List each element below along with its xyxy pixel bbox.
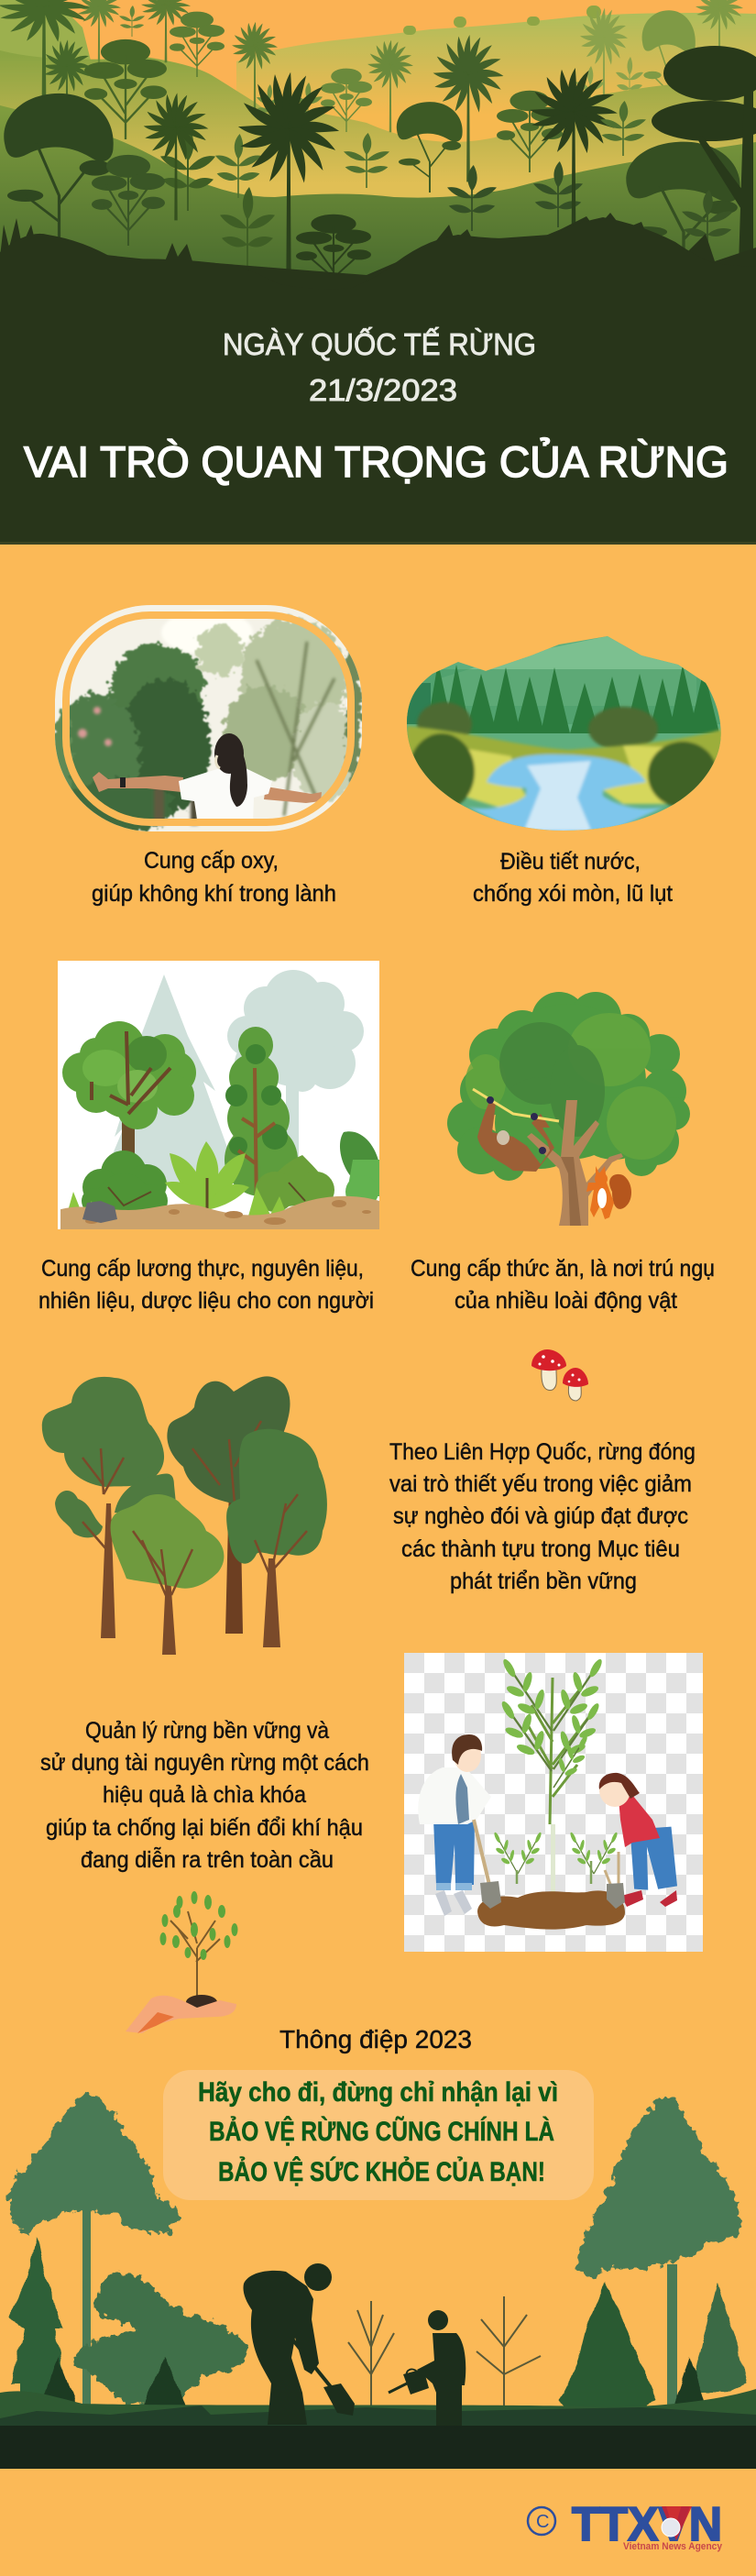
caption: oxygen — [92, 848, 336, 907]
panel: forest resources — [58, 961, 379, 1229]
caption: resources: Cung cấp lương thực, nguyên liệu, — [41, 1256, 364, 1282]
tree back left — [42, 1377, 164, 1638]
caption: animals — [411, 1256, 715, 1314]
text: sustainable management: giúp ta chống lại biến đổi khí hậu — [46, 1815, 363, 1841]
text: United Nations: sự nghèo đói và giúp đạt được — [393, 1503, 688, 1529]
soil — [58, 1196, 379, 1229]
mid trees — [0, 0, 413, 139]
caption: oxygen: giúp không khí trong lành — [92, 881, 336, 907]
ground — [0, 2389, 756, 2438]
tree front right — [226, 1429, 327, 1647]
boy silhouette — [389, 2310, 466, 2426]
text: sustainable management: đang diễn ra trên toàn cầu — [81, 1846, 334, 1873]
copyright mark — [528, 2507, 555, 2535]
caption: water — [473, 849, 673, 907]
panel: oxygen photo — [52, 605, 362, 834]
main title: VAI TRÒ QUAN TRỌNG CỦA RỪNG — [24, 437, 729, 486]
caption: oxygen: Cung cấp oxy, — [144, 848, 279, 874]
tree back centre — [167, 1376, 290, 1634]
foreground bushes — [69, 1131, 379, 1216]
panel: lake and forest — [403, 633, 729, 834]
icon: mushrooms — [531, 1349, 588, 1401]
trunk — [527, 1100, 623, 1226]
panel: tree with animals — [447, 992, 690, 1226]
copyright mark: C — [536, 2512, 549, 2532]
girl — [599, 1773, 677, 1909]
tree front small — [111, 1474, 224, 1655]
man — [243, 2263, 355, 2425]
text: United Nations: Theo Liên Hợp Quốc, rừng đóng — [389, 1439, 696, 1465]
caption: water: Điều tiết nước, — [500, 849, 641, 875]
sapling — [493, 1657, 619, 1893]
text: sustainable management: hiệu quả là chìa khóa — [103, 1782, 306, 1808]
orangutan — [473, 1089, 559, 1172]
tall middle tree — [225, 1027, 298, 1210]
background pine and tree — [101, 970, 364, 1183]
ring — [66, 615, 351, 822]
icon: sapling in hands — [126, 1891, 238, 2033]
message box: BẢO VỆ SỨC KHỎE CỦA BẠN! — [218, 2156, 545, 2187]
caption: animals: Cung cấp thức ăn, là nơi trú ngụ — [411, 1256, 715, 1282]
crown — [447, 992, 690, 1181]
text: sustainable management — [40, 1718, 369, 1873]
header banner — [0, 0, 756, 545]
far trees — [575, 0, 743, 116]
caption: animals: của nhiều loài động vật — [455, 1288, 677, 1314]
trees right — [559, 2094, 747, 2420]
logo: TTXVN: Vietnam News Agency — [623, 2541, 723, 2552]
caption: resources: nhiên liệu, dược liệu cho con người — [38, 1288, 374, 1314]
rock — [82, 1201, 117, 1223]
text: United Nations: phát triển bền vững — [450, 1569, 637, 1594]
saplings — [348, 2296, 541, 2420]
message box: BẢO VỆ RỪNG CŨNG CHÍNH LÀ — [209, 2116, 554, 2147]
panel: people planting trees — [404, 1653, 703, 1952]
text: sustainable management: Quản lý rừng bền vững và — [85, 1718, 329, 1744]
message box: Hãy cho đi, đừng chỉ nhận lại vì — [198, 2077, 558, 2108]
caption: resources — [38, 1256, 374, 1314]
text: sustainable management: sử dụng tài nguyên rừng một cách — [40, 1750, 369, 1776]
soil mound — [477, 1890, 625, 1930]
near trees — [0, 35, 756, 303]
boy — [418, 1734, 501, 1916]
header subtitle: NGÀY QUỐC TẾ RỪNG — [223, 326, 536, 361]
heading: message 2023: Thông điệp 2023 — [279, 2025, 472, 2053]
left tree — [62, 1021, 196, 1164]
squirrel — [586, 1166, 631, 1219]
woman — [93, 733, 322, 825]
caption: water: chống xói mòn, lũ lụt — [473, 881, 673, 907]
message box — [163, 2070, 594, 2200]
trees left — [9, 2092, 248, 2420]
header subtitle — [223, 326, 536, 407]
text: United Nations: các thành tựu trong Mục tiêu — [401, 1536, 680, 1562]
logo: TTXVN: TTXVN — [572, 2498, 722, 2551]
illustration: planting silhouette scene — [0, 2092, 756, 2469]
text: United Nations — [389, 1439, 696, 1594]
text: United Nations: vai trò thiết yếu trong việc giảm — [389, 1471, 692, 1497]
header subtitle: 21/3/2023 — [309, 373, 457, 407]
illustration: group of trees — [42, 1376, 327, 1655]
dark title ground — [0, 217, 756, 545]
